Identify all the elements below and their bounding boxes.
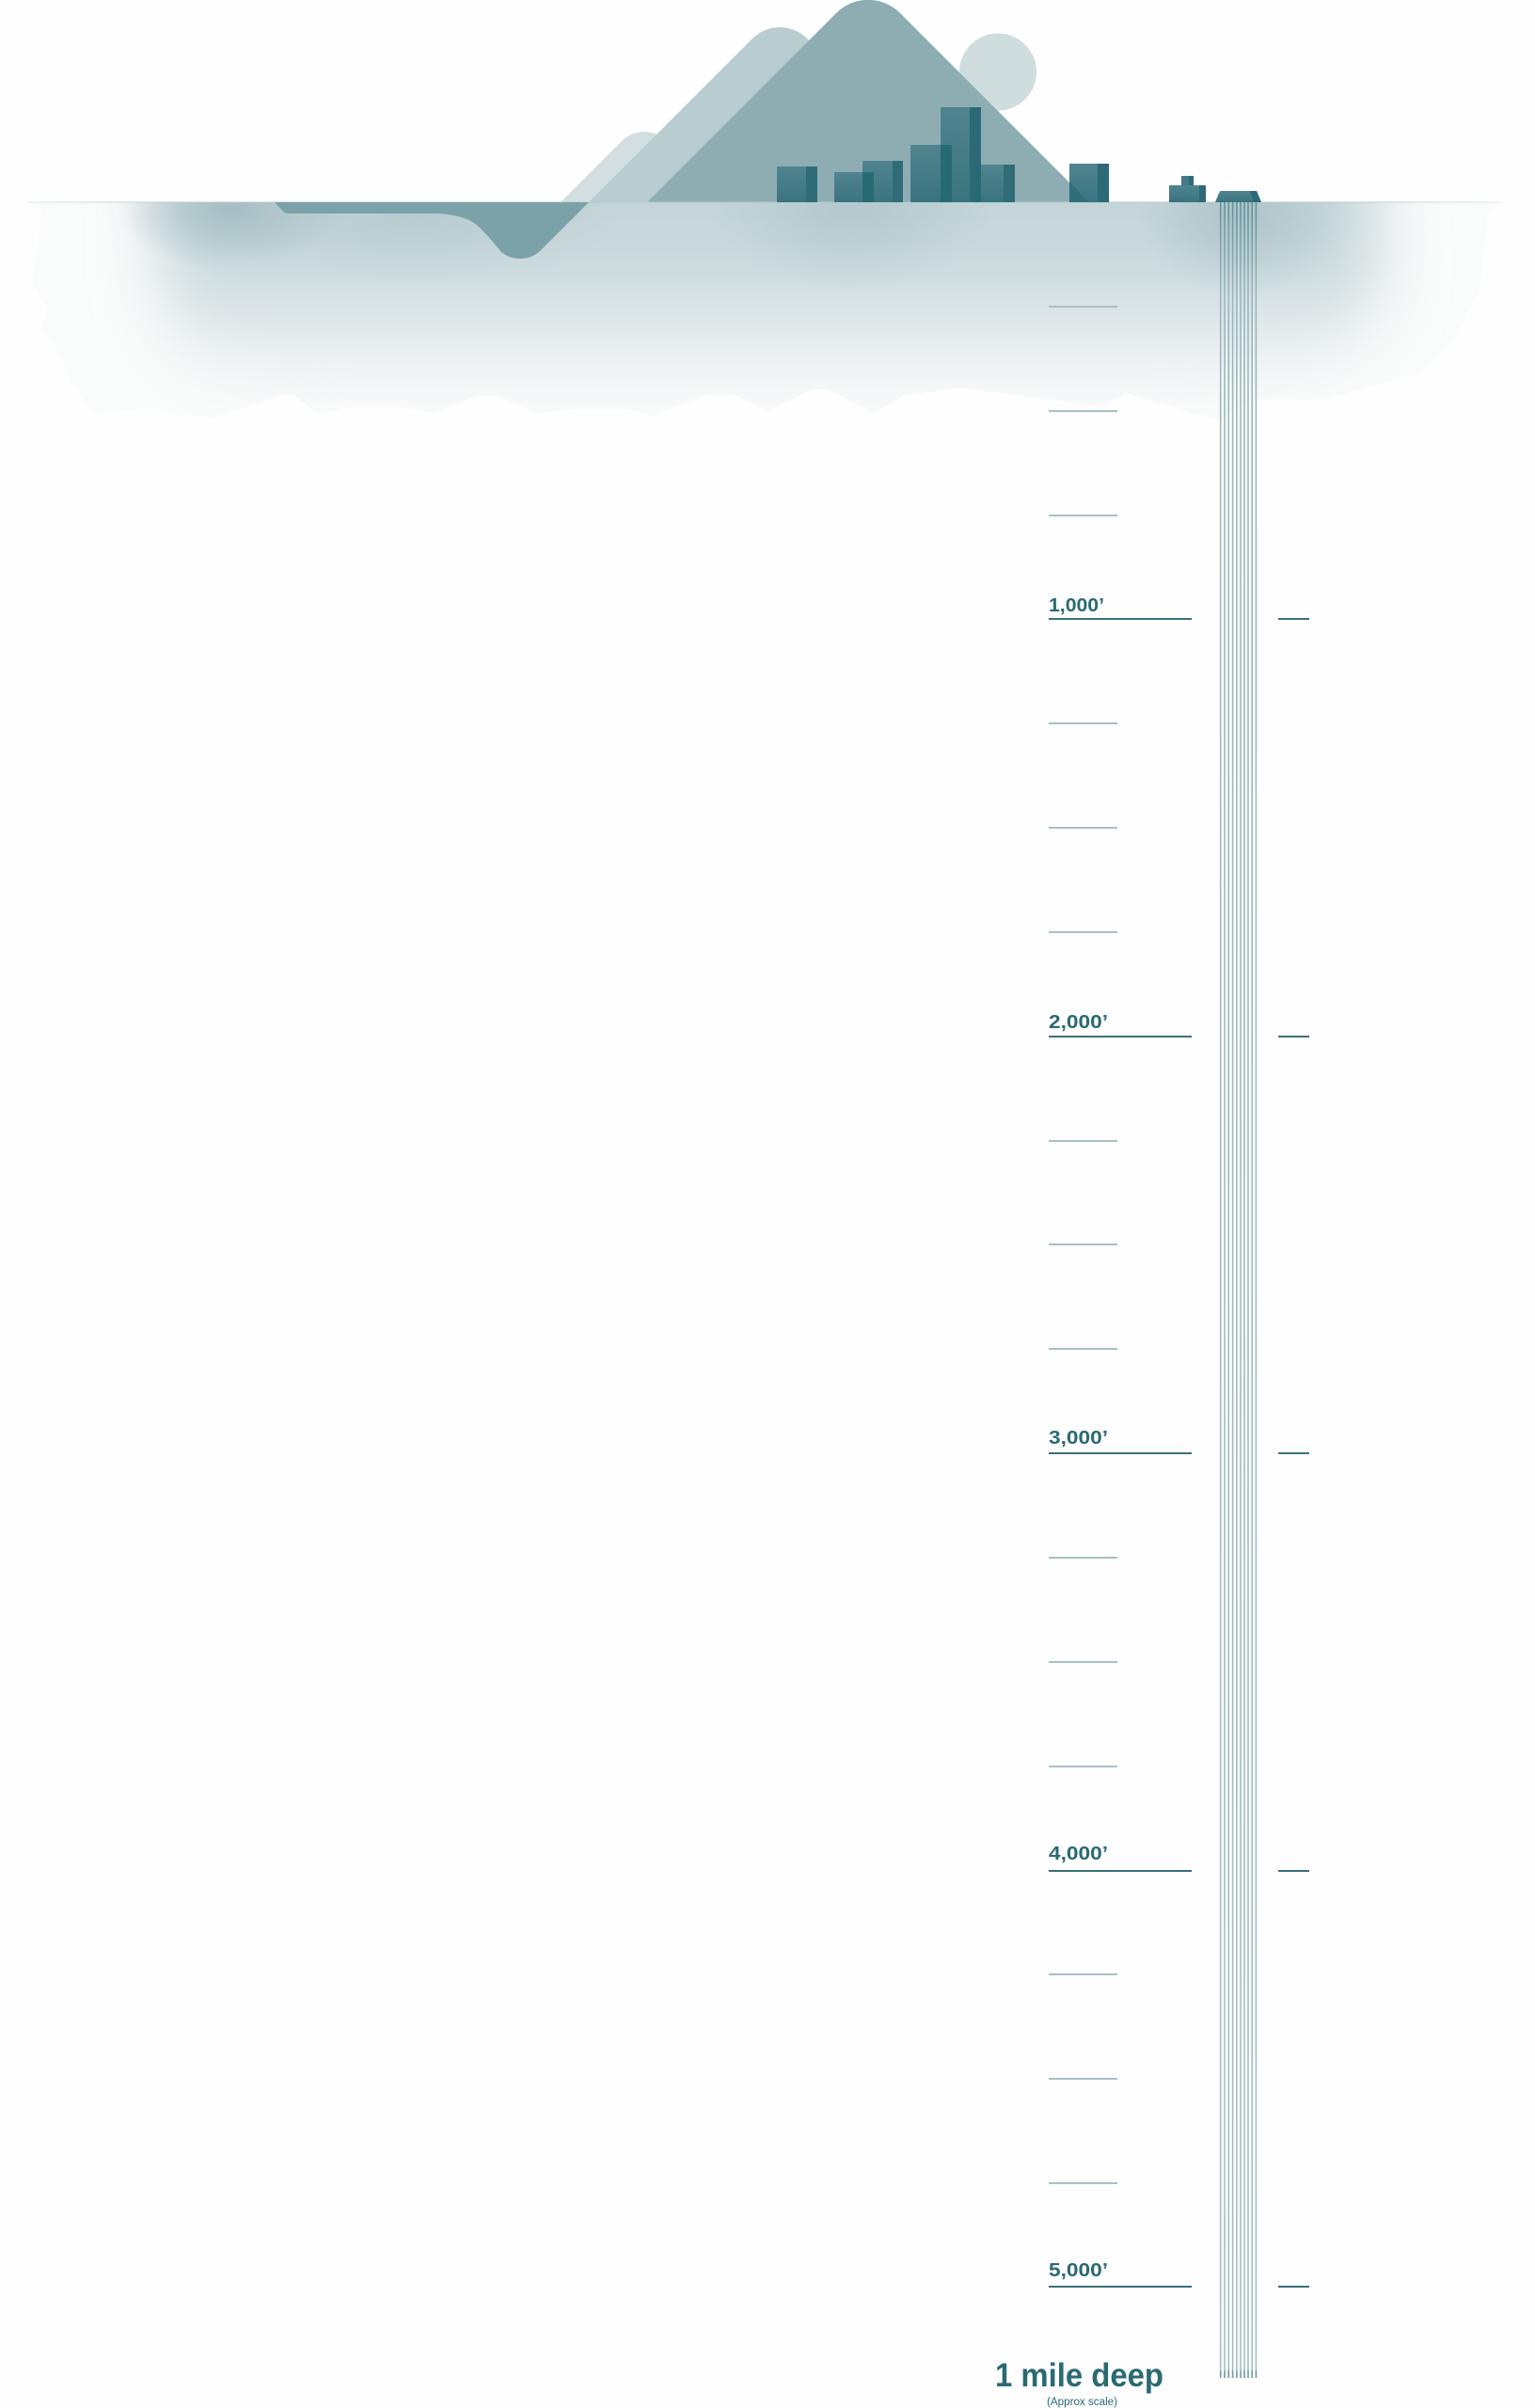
depth marker 1,000: 1,000’ (1049, 595, 1104, 616)
building 6 (975, 165, 1015, 202)
building 7 (1069, 164, 1109, 202)
drilling pad (1215, 191, 1261, 202)
depth marker 4,000: 4,000’ (1049, 1844, 1108, 1864)
depth marker 5,000: 5,000’ (1049, 2260, 1108, 2281)
sun circle (959, 34, 1037, 111)
middle mountain (589, 27, 971, 202)
depth marker 3,000: 3,000’ (1049, 1428, 1108, 1449)
building 3 (862, 161, 903, 202)
small back mountain (561, 132, 728, 202)
depth marker 2,000: 2,000’ (1049, 1012, 1108, 1033)
depth caption: 1 mile deep (995, 2357, 1163, 2394)
building 5 (941, 107, 981, 202)
ground line (27, 201, 1502, 203)
building 1 (777, 166, 817, 202)
minor depth ticks (1049, 306, 1117, 2184)
main mountain (647, 0, 1089, 202)
small plant building (1169, 176, 1206, 202)
lake (275, 202, 589, 259)
building 2 (834, 172, 874, 202)
city buildings (777, 107, 1206, 202)
building 4 (910, 145, 952, 202)
underground soil layer (27, 201, 1502, 395)
well pipes (1221, 202, 1256, 2378)
scale note: (Approx scale) (1047, 2397, 1117, 2408)
